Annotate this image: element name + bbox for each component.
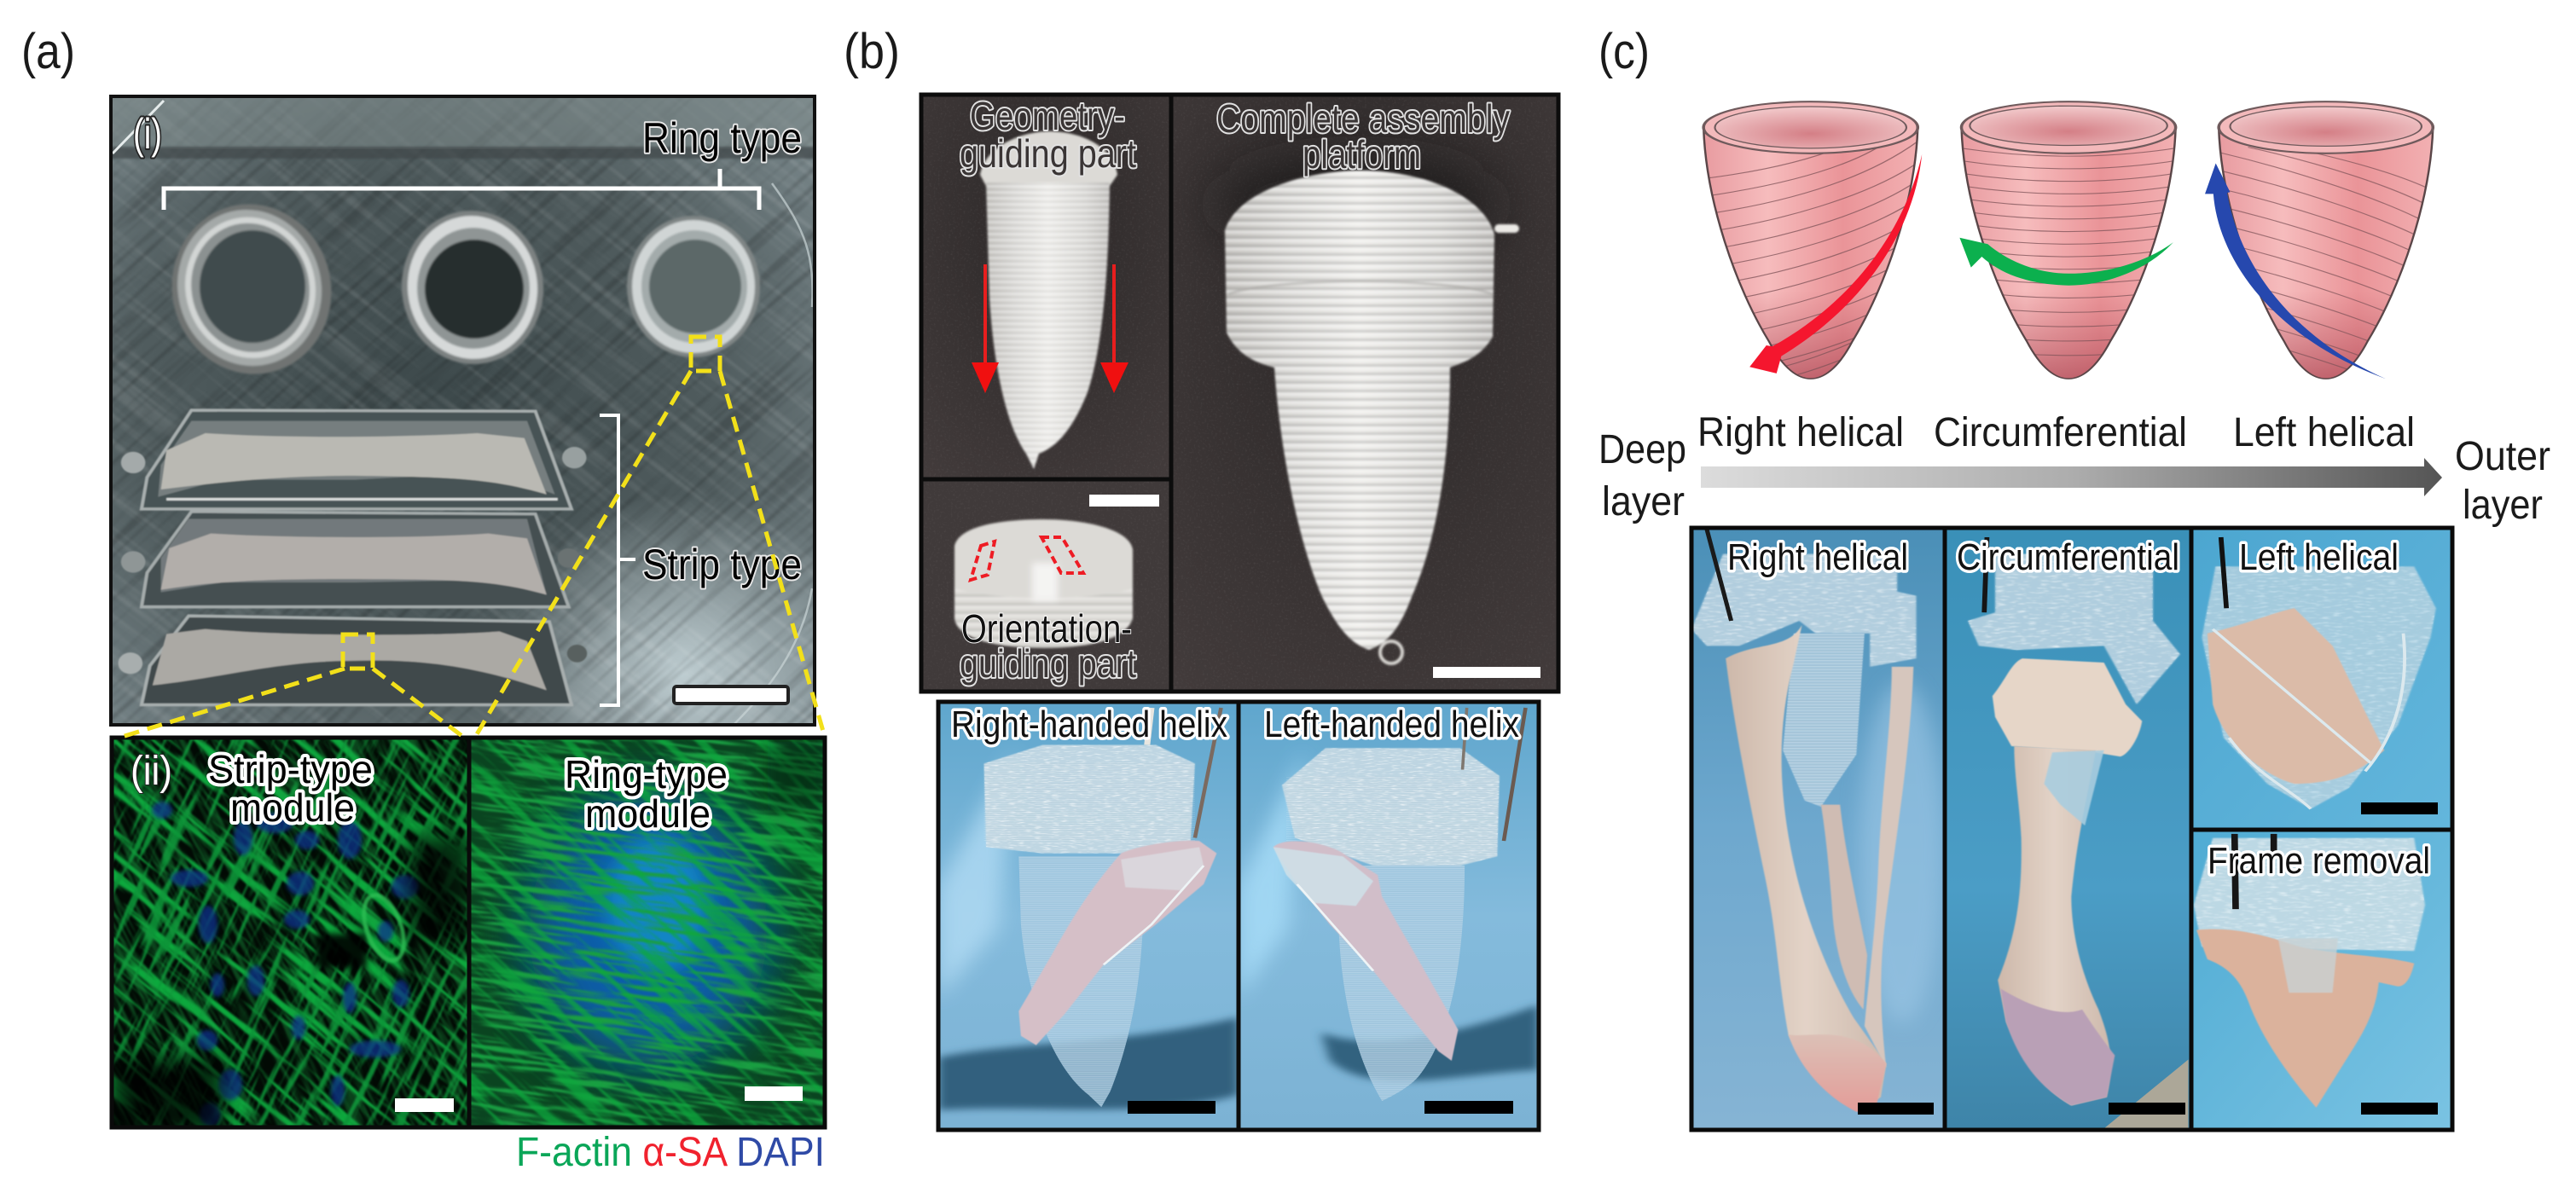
image: strip-type module [112,738,469,1134]
label: deep layer: layer [1602,479,1685,524]
gel tissue band [1993,658,2142,756]
module label: Strip-type [208,747,373,791]
disc [954,519,1133,648]
frames: panel b bottom [938,702,1539,1130]
gel strip left [1726,625,1886,1112]
scale bar [1858,1103,1934,1115]
label: Right helical [1727,536,1908,578]
pink bottom [1789,1034,1886,1112]
label: deep layer [1598,427,1686,524]
panel: circumferential photo [1945,528,2191,1131]
panel: right helical photo [1691,528,1945,1130]
frames: panel c photos [1691,528,2452,1130]
label: guiding part [960,131,1136,176]
label: Frame removal [2208,840,2430,882]
panel: frame removal photo [2191,830,2452,1130]
label: Right-handed helix [951,704,1227,745]
panel: left helical photo [2191,528,2452,830]
arrow: deep to outer gradient [1701,458,2442,496]
cone tip [2044,750,2104,825]
ring 3 [627,216,760,357]
scale bar [1433,667,1540,678]
panel: orientation-guiding part [921,479,1171,690]
scale bar [1128,1101,1215,1114]
scale bar [2361,802,2438,814]
arrow: blue [2205,164,2386,379]
label: deep layer: Deep [1598,427,1686,472]
label: Complete assembly [1216,96,1510,141]
label [960,606,1136,686]
metal dish background [113,98,813,723]
strip 3 [119,616,587,705]
top frame [2194,838,2425,951]
panel: a(i) photo of ring and strip modules [113,98,813,723]
cone part [980,131,1117,469]
legend: stain colours: F-actin α-SA DAPI [516,1130,825,1175]
strip modules [119,410,587,705]
gel strip right [1865,667,1913,1068]
forceps [1984,537,1987,612]
label: ring type: Ring type [642,114,802,162]
scale bar [674,686,788,704]
diagram: fibre orientation ventricle models [1697,101,2440,409]
label: platform [1303,132,1421,177]
panel: right-handed helix photo [938,702,1239,1130]
platform [1225,171,1519,663]
red arrow left [972,264,999,393]
label: Orientation- [961,606,1132,651]
label: strip type: Strip type [642,541,802,588]
label: outer layer [2455,434,2550,528]
panel: complete assembly platform [1171,95,1558,692]
ring modules [171,203,761,375]
platform [1691,554,1916,667]
forceps [2235,834,2274,909]
image: ring-type module [469,738,827,1127]
label: left helical: Left helical [2233,410,2415,455]
scale bar [2361,1103,2438,1115]
label: circumferential: Circumferential [1934,410,2187,455]
ring 1 [171,203,333,375]
frames: panel b top [921,95,1558,692]
module label: module [230,785,355,830]
gel strip [1273,841,1458,1061]
dark fabric fold [938,1017,1239,1110]
label: guiding part [960,641,1136,686]
beige background corner [2104,1059,2188,1131]
forceps [1195,708,1221,837]
gel strip middle [1821,805,1867,1010]
model: left helical [2212,101,2440,409]
module label [208,747,373,830]
arrow: red [1749,154,1922,374]
gel strip [1018,841,1216,1045]
frame and divider [112,738,825,1127]
ring type bracket [164,169,759,210]
forceps [1504,708,1525,841]
strip 1 [121,410,587,509]
label [960,94,1136,176]
module label: module [585,791,711,836]
label: right helical: Right helical [1697,410,1904,455]
ring 2 [401,210,544,365]
strip type bracket [600,415,635,705]
label: panel c: (c) [1598,24,1650,79]
red dashed markers [971,537,1083,580]
label: (ii): (ii) [131,749,172,794]
gel [2208,608,2384,784]
platform [1282,748,1500,866]
arrow: green [1959,238,2173,286]
panel: left-handed helix photo [1239,702,1539,1130]
frame: a(i) border [111,96,815,725]
label: panel b: (b) [844,24,900,79]
model: right helical [1697,101,1924,384]
red arrow right [1100,264,1128,393]
label: Circumferential [1957,536,2179,578]
platform [1968,554,2180,704]
zoom guides: yellow dashed callouts [122,337,824,737]
label [1216,96,1510,177]
cone [1338,866,1465,1101]
scale bar [1424,1101,1513,1114]
scale bar [1089,495,1159,507]
module label: Ring-type [565,752,728,796]
tissue [2196,929,2414,1108]
label: outer layer: Outer [2455,434,2550,479]
panel: a(ii) fluorescence images [112,738,827,1134]
dark fabric fold [1321,1005,1539,1081]
label: outer layer: layer [2463,483,2543,528]
module label [565,752,728,836]
label: Geometry- [970,94,1125,138]
platform [984,745,1195,854]
translucent core [2278,938,2338,993]
strip 2 [121,512,580,607]
label: panel a: (a) [21,24,75,79]
forceps [1707,529,1732,621]
forceps [2221,537,2226,608]
cone [1018,856,1144,1107]
panel: geometry-guiding part [921,94,1171,479]
label: Left helical [2239,536,2399,578]
label: (i): (i) [133,110,162,158]
label: Left-handed helix [1264,704,1519,745]
long gel [1998,746,2110,1105]
bottom frame [2000,988,2115,1105]
scale bar [395,1098,454,1112]
scale bar [2109,1103,2185,1115]
cone [1783,634,1865,807]
scale bar [745,1086,803,1101]
model: circumferential [1955,101,2182,379]
frame [2202,566,2436,808]
frame wires [2213,629,2405,808]
